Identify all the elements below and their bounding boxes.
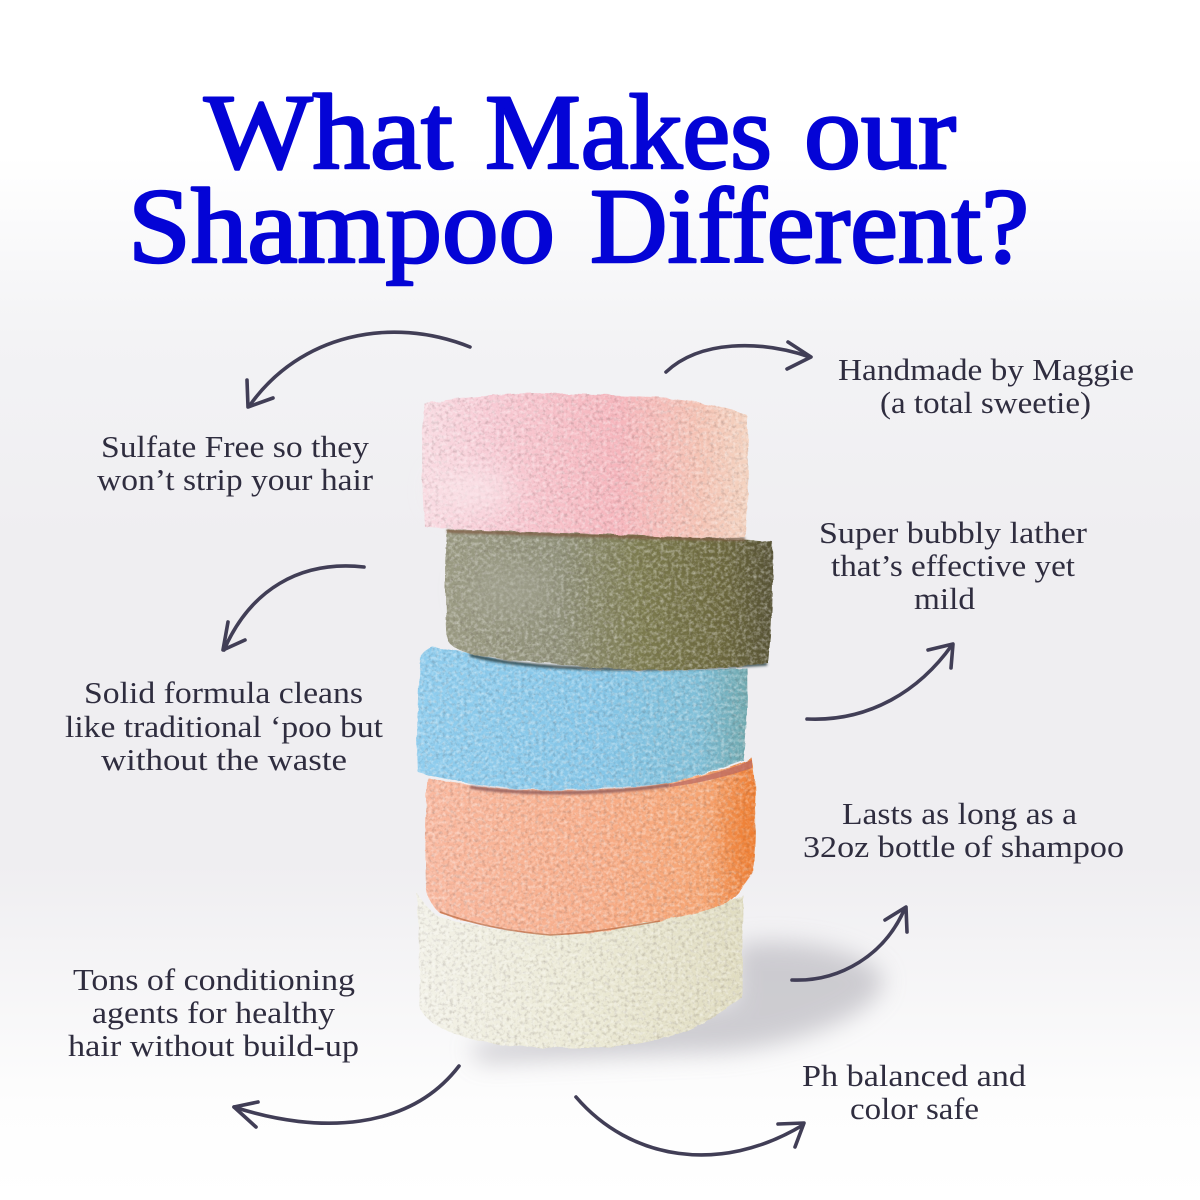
text: handmade: Handmade by Maggie bbox=[838, 352, 1134, 387]
cream bar bbox=[417, 893, 743, 1048]
arrow: to solid formula bbox=[223, 566, 364, 650]
text: conditioning agents: agents for healthy bbox=[92, 995, 336, 1030]
text: handmade: (a total sweetie) bbox=[880, 385, 1091, 420]
text: conditioning agents bbox=[68, 962, 359, 1063]
text: lasts long bbox=[803, 796, 1124, 864]
arrow: to lasts long bbox=[792, 907, 907, 980]
text: solid formula bbox=[65, 675, 383, 777]
shadow bbox=[470, 942, 883, 1062]
text: lasts long: Lasts as long as a bbox=[842, 796, 1077, 831]
text: solid formula: like traditional ‘poo but bbox=[65, 709, 383, 744]
pink bar bbox=[423, 393, 748, 539]
text: bubbly lather: mild bbox=[914, 581, 976, 616]
text: bubbly lather: that’s effective yet bbox=[831, 548, 1075, 583]
text: conditioning agents: Tons of conditioning bbox=[73, 962, 355, 997]
arrow: to conditioning bbox=[234, 1066, 459, 1127]
title bbox=[128, 74, 1029, 286]
text: sulfate free: won’t strip your hair bbox=[97, 462, 374, 497]
shampoo bar stack bbox=[417, 393, 883, 1062]
text: ph balanced bbox=[802, 1058, 1027, 1126]
text: conditioning agents: hair without build-up bbox=[68, 1028, 359, 1063]
title: Different? bbox=[590, 168, 1029, 286]
arrow: to ph balanced bbox=[576, 1097, 804, 1155]
arrow: to handmade bbox=[666, 342, 811, 372]
title: Makes bbox=[485, 74, 772, 192]
title: our bbox=[804, 74, 956, 192]
text: handmade bbox=[838, 352, 1134, 420]
blue bar bbox=[417, 647, 747, 793]
text: ph balanced: color safe bbox=[850, 1091, 979, 1126]
text: lasts long: 32oz bottle of shampoo bbox=[803, 829, 1124, 864]
text: solid formula: Solid formula cleans bbox=[84, 675, 363, 710]
text: bubbly lather bbox=[819, 515, 1088, 616]
title: What bbox=[204, 74, 453, 192]
text: solid formula: without the waste bbox=[101, 742, 347, 777]
text: ph balanced: Ph balanced and bbox=[802, 1058, 1027, 1093]
title: Shampoo bbox=[128, 168, 555, 286]
text: sulfate free bbox=[97, 429, 374, 497]
arrow: to sulfate free bbox=[247, 332, 470, 407]
arrow: to bubbly lather bbox=[807, 644, 953, 719]
text: sulfate free: Sulfate Free so they bbox=[101, 429, 370, 464]
green bar bbox=[446, 530, 773, 670]
text: bubbly lather: Super bubbly lather bbox=[819, 515, 1088, 550]
orange bar bbox=[425, 758, 759, 935]
